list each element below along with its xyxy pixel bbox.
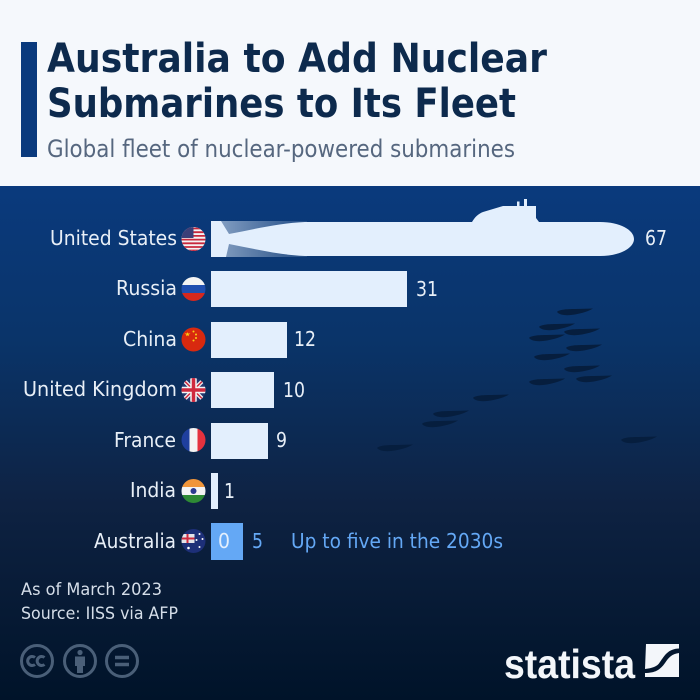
value: 67: 67: [645, 226, 667, 250]
source note: As of March 2023: [21, 580, 162, 599]
bar: Australia: [211, 523, 243, 560]
ocean background: [0, 186, 700, 700]
bar: Russia: [211, 271, 407, 307]
title: [47, 36, 547, 127]
value: 12: 12: [294, 327, 316, 351]
label: United Kingdom: United Kingdom: [23, 377, 177, 401]
flag: United States: [182, 227, 206, 251]
label: France: France: [114, 428, 176, 452]
value: 10: 10: [283, 378, 305, 402]
flag: Australia: [182, 529, 206, 553]
annotation: Up to five in the 2030s: [291, 529, 503, 553]
icon: creative commons: [22, 646, 138, 676]
label: United States: United States: [50, 226, 177, 250]
bar: United Kingdom: [211, 372, 274, 408]
flag: United Kingdom: [182, 378, 206, 402]
source note: [21, 580, 178, 623]
subtitle: Global fleet of nuclear-powered submarines: [47, 135, 515, 163]
value: Australia planned 5: 5: [252, 529, 263, 553]
flag: Russia: [182, 277, 206, 301]
bar: India: [211, 473, 218, 509]
bar: France: [211, 423, 268, 459]
flag: France: [182, 428, 206, 452]
source note: Source: IISS via AFP: [21, 604, 178, 623]
label: India: India: [130, 478, 176, 502]
bar: China: [211, 322, 287, 358]
country labels: [23, 226, 177, 553]
title: Australia to Add Nuclear: [47, 36, 547, 82]
value: 31: 31: [416, 277, 438, 301]
value: 9: 9: [276, 428, 287, 452]
value: Australia 0: 0: [218, 529, 230, 553]
flag: China: [182, 328, 206, 352]
bar values: [224, 226, 667, 503]
flag: India: [182, 479, 206, 503]
label: Russia: Russia: [116, 276, 177, 300]
title: Submarines to Its Fleet: [47, 81, 516, 127]
decorative school of fish: [377, 308, 657, 451]
bar: United States submarine: [211, 199, 634, 257]
label: Australia: Australia: [94, 529, 176, 553]
statista logo icon: [645, 644, 679, 677]
header background: [0, 0, 700, 186]
statista wordmark: statista: [504, 641, 636, 687]
accent bar: [21, 42, 37, 157]
value: 1: 1: [224, 479, 235, 503]
label: China: China: [123, 327, 177, 351]
